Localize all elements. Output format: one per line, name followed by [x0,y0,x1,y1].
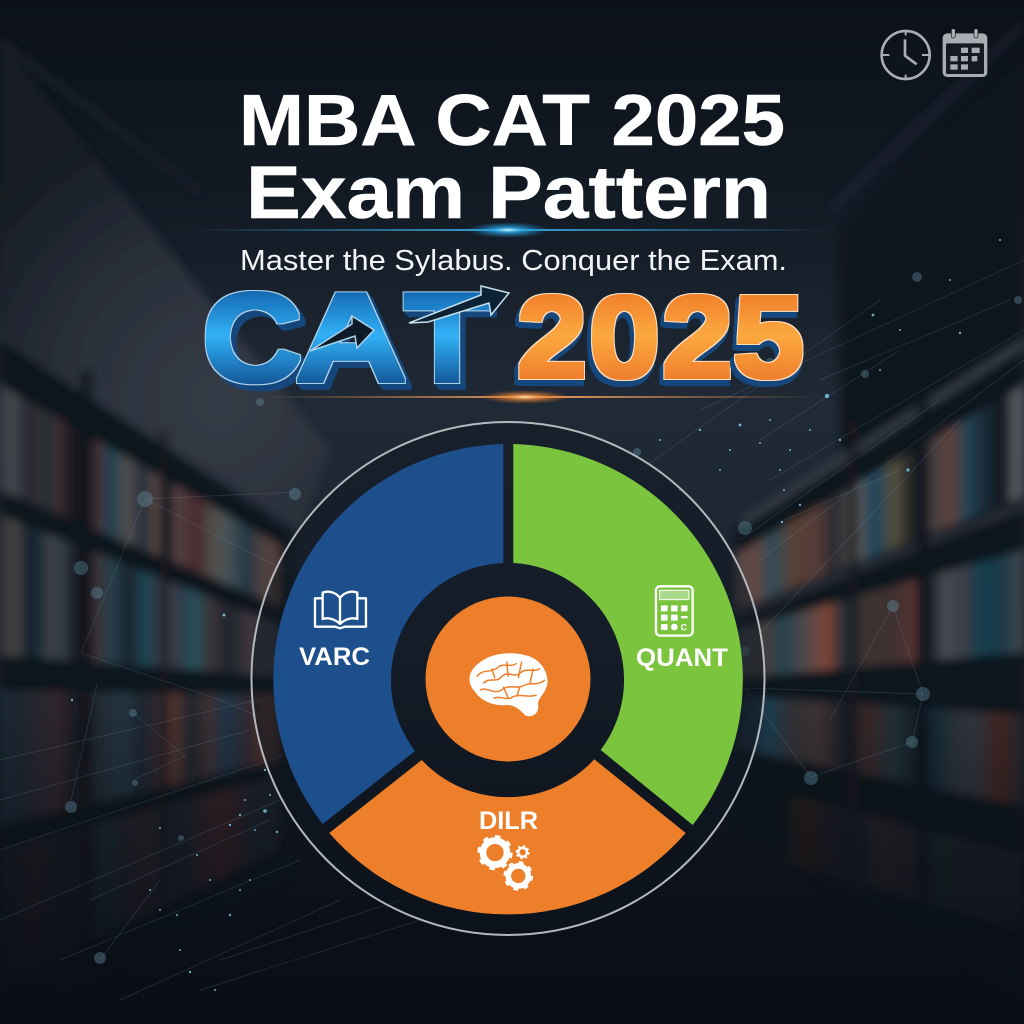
logo: CAT 2025: 0 [589,272,660,402]
logo: CAT 2025: A [295,267,407,408]
subtitle: Master the Sylabus. Conquer the Exam. [240,245,787,277]
donut chart [252,422,764,935]
icon: calendar [943,29,987,77]
logo: CAT 2025: 2 [517,272,587,402]
logo: CAT 2025: T [404,267,490,408]
segment: VARC [273,444,503,824]
icon: clock [882,31,930,79]
icon: brain [470,653,547,716]
label: VARC: VARC [299,643,370,671]
icon: open book [315,592,366,628]
logo: CAT 2025 [202,267,804,408]
title: Exam Pattern [246,151,771,234]
title: MBA CAT 2025 [239,81,785,161]
center circle [426,596,590,762]
orange glow line [260,390,820,404]
title [239,81,785,234]
network constellation overlay [0,239,1024,1000]
logo: CAT 2025: 2 [662,272,733,402]
icon: arrow on T [409,286,509,323]
glowing divider [190,222,830,238]
segment: DILR [329,759,686,914]
label: DILR: DILR [479,807,538,835]
icon: calculator: C [681,623,688,633]
logo: CAT 2025: 5 [733,272,804,402]
icon: arrow in A [310,316,374,351]
segment: QUANT [513,444,743,825]
icon: calculator [656,586,693,636]
icon: gears [479,837,531,889]
label: QUANT: QUANT [636,644,728,672]
logo: CAT 2025: C [202,267,302,408]
